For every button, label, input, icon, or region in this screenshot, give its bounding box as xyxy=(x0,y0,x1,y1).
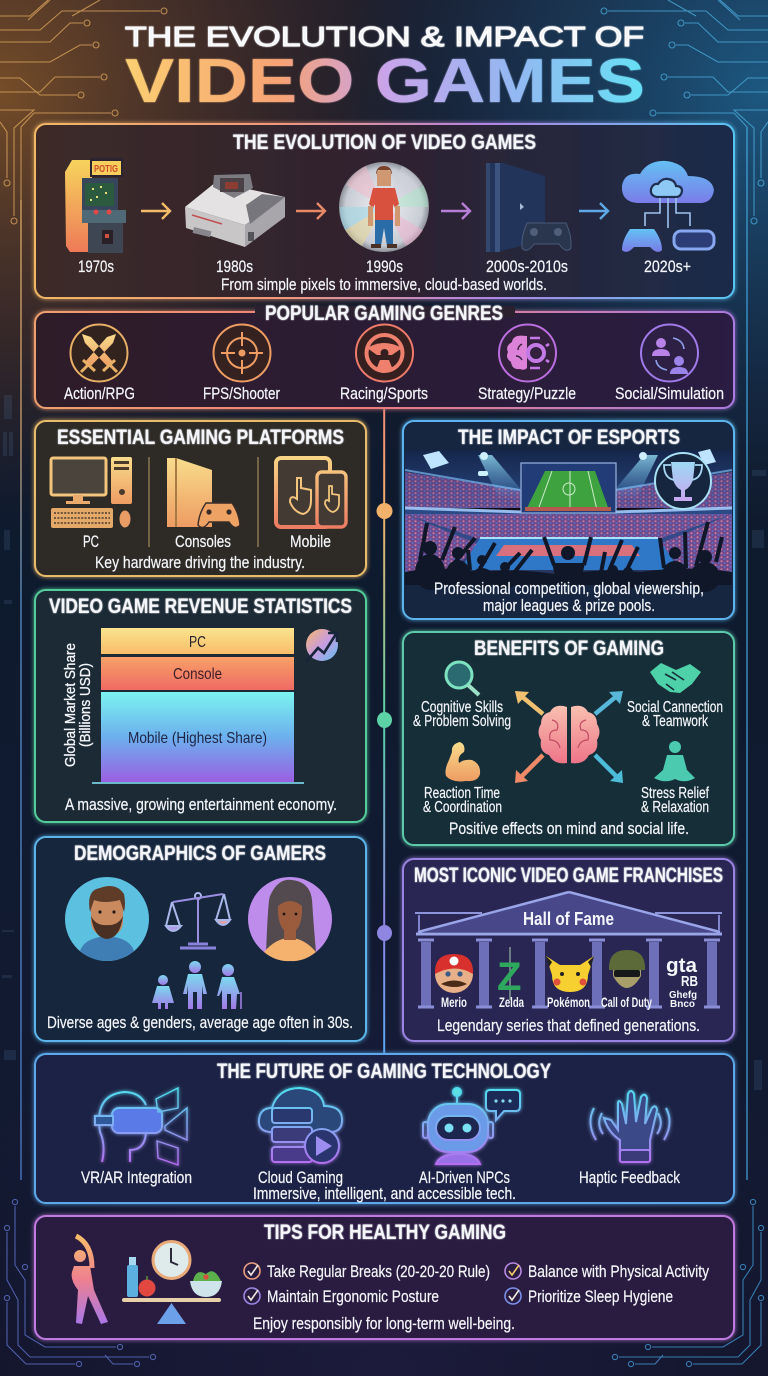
crowd silhouettes xyxy=(405,522,732,592)
speech dots xyxy=(494,1099,512,1103)
icon: stretching figure xyxy=(72,1236,108,1324)
benefit labels: Reaction Time xyxy=(424,785,500,802)
icon: cloud server xyxy=(259,1088,342,1163)
benefit labels: Stress Relief xyxy=(641,785,710,802)
icon: growth arrow xyxy=(306,629,338,662)
benefit labels: & Teamwork xyxy=(642,713,708,730)
stacked bar chart xyxy=(92,628,304,783)
icon: meditation figure xyxy=(654,741,695,781)
labels: Haptic Feedback xyxy=(579,1168,680,1187)
heading: DEMOGRAPHICS OF GAMERS xyxy=(74,842,326,865)
franchise labels: Pokémon xyxy=(547,995,590,1010)
arrows xyxy=(520,695,618,778)
icon: plumber xyxy=(435,954,473,993)
icon: soldier xyxy=(609,950,645,988)
caption: Legendary series that defined generations. xyxy=(437,1016,700,1035)
y axis label xyxy=(62,643,94,767)
heading: ESSENTIAL GAMING PLATFORMS xyxy=(57,426,344,449)
panel frame xyxy=(35,837,366,1041)
heading: POPULAR GAMING GENRES xyxy=(265,302,503,325)
decade labels: 2000s-2010s xyxy=(486,257,568,276)
arrow xyxy=(296,203,325,219)
heading: THE EVOLUTION OF VIDEO GAMES xyxy=(233,131,536,154)
icon: muscle arm xyxy=(445,742,480,781)
panel frame xyxy=(35,1054,734,1203)
labels: VR/AR Integration xyxy=(81,1168,192,1187)
panel: tips xyxy=(35,1216,734,1339)
benefit labels: & Problem Solving xyxy=(413,713,511,730)
labels: AI-Driven NPCs xyxy=(419,1168,510,1187)
stadium illustration xyxy=(405,449,732,592)
icon: yellow mouse xyxy=(546,956,594,992)
label: Strategy/Puzzle xyxy=(478,384,576,403)
decade labels xyxy=(78,257,691,276)
heading: THE FUTURE OF GAMING TECHNOLOGY xyxy=(217,1060,551,1083)
big screen xyxy=(521,463,616,513)
benefit labels: Social Cannection xyxy=(627,699,723,716)
benefit labels: & Coordination xyxy=(423,799,502,816)
icon: handshake xyxy=(650,663,701,693)
panel: revenue xyxy=(35,590,366,822)
game logo text: gta xyxy=(666,955,698,977)
icon: haptic glove xyxy=(590,1091,670,1162)
heading gap xyxy=(255,306,515,318)
caption: major leagues & prize pools. xyxy=(483,596,655,615)
icon: woman avatar xyxy=(248,877,332,961)
labels xyxy=(83,532,331,551)
labels: PC xyxy=(83,532,99,551)
icon: crosshair xyxy=(214,324,270,382)
panel: genres xyxy=(35,302,734,408)
arrow xyxy=(441,203,470,219)
heading: THE IMPACT OF ESPORTS xyxy=(458,426,680,449)
tip checkmarks xyxy=(244,1263,521,1304)
caption: Enjoy responsibly for long-term well-being. xyxy=(253,1314,515,1333)
benefit labels: & Relaxation xyxy=(641,799,709,816)
heading: BENEFITS OF GAMING xyxy=(474,637,664,660)
circuit traces: bottom left xyxy=(4,1199,156,1367)
decade labels: 1980s xyxy=(216,257,253,276)
tips list xyxy=(267,1262,709,1306)
decade labels: 2020s+ xyxy=(644,257,691,276)
icon: modern console xyxy=(486,163,571,252)
stacked bar chart: Console xyxy=(173,666,222,683)
panel frame xyxy=(35,124,734,298)
caption: Immersive, intelligent, and accessible tech. xyxy=(253,1184,516,1203)
game logo text: Bnco xyxy=(670,999,695,1010)
icon: cloud network xyxy=(622,161,714,252)
side tech marks xyxy=(2,395,766,1090)
heading: VIDEO GAME REVENUE STATISTICS xyxy=(49,595,352,618)
icon: arcade cabinet xyxy=(65,158,126,253)
caption: Professional competition, global viewership, xyxy=(434,579,704,598)
panel frame xyxy=(35,312,734,408)
icon: robot xyxy=(423,1088,520,1164)
panel: benefits xyxy=(403,632,734,845)
benefit labels xyxy=(413,699,723,816)
icon: arcade cabinet: POTIG xyxy=(94,164,118,175)
icon: man avatar xyxy=(65,877,149,961)
game logo text: RB xyxy=(681,973,698,990)
icon: disc with character xyxy=(339,162,429,252)
arrowheads xyxy=(515,691,623,783)
divider xyxy=(149,457,258,547)
label: Social/Simulation xyxy=(615,384,724,403)
icon: magnifier xyxy=(446,662,479,695)
icon: age group figures xyxy=(152,961,241,1009)
title line 1: THE EVOLUTION & IMPACT OF xyxy=(125,21,644,52)
icon: VR headset xyxy=(95,1088,187,1165)
caption xyxy=(434,579,704,615)
game logo text xyxy=(666,955,698,1010)
caption: Positive effects on mind and social life. xyxy=(449,819,689,838)
circuit traces: top left xyxy=(0,0,167,224)
panel: demographics xyxy=(35,837,366,1041)
panel: evolution xyxy=(35,124,734,298)
icon: social swap xyxy=(641,324,698,382)
panel: future xyxy=(35,1054,734,1203)
panel frame xyxy=(403,859,734,1041)
tips list: Prioritize Sleep Hygiene xyxy=(528,1287,673,1306)
icon: brain with gear xyxy=(499,324,556,382)
franchise labels: Merio xyxy=(441,995,467,1010)
stacked bar chart: PC xyxy=(189,634,206,651)
trophy badge xyxy=(655,453,711,509)
labels xyxy=(81,1168,680,1187)
franchise labels: Call of Duty xyxy=(601,995,652,1010)
arrow xyxy=(141,203,170,219)
icon: balance scales xyxy=(166,893,230,948)
franchise labels xyxy=(441,995,652,1010)
panel frame xyxy=(403,421,734,619)
franchise labels: Zelda xyxy=(499,995,524,1010)
caption: Key hardware driving the industry. xyxy=(95,553,305,572)
labels: Mobile xyxy=(290,532,331,551)
center connector line xyxy=(376,408,392,1054)
heading: TIPS FOR HEALTHY GAMING xyxy=(264,1221,506,1244)
labels: Consoles xyxy=(175,532,231,551)
icon: tablet and phone xyxy=(276,458,346,527)
caption: A massive, growing entertainment economy. xyxy=(65,795,337,814)
panel frame xyxy=(403,632,734,845)
title xyxy=(125,21,645,116)
labels: Cloud Gaming xyxy=(258,1168,343,1187)
y axis label: Global Market Share xyxy=(62,643,79,767)
decade labels: 1970s xyxy=(78,257,114,276)
panel frame xyxy=(35,1216,734,1339)
benefit labels: Cognitive Skills xyxy=(421,699,503,716)
panel: platforms xyxy=(35,421,366,576)
panel: franchises xyxy=(403,859,734,1041)
icon: desktop pc xyxy=(51,457,132,528)
icon: green Z: Z xyxy=(497,955,521,999)
y axis label: (Billions USD) xyxy=(77,663,94,747)
arrow xyxy=(579,203,608,219)
temple: Hall of Fame xyxy=(523,909,614,929)
icon: brain xyxy=(538,706,600,763)
panel frame xyxy=(35,421,366,576)
icon: console and controller xyxy=(167,458,240,527)
caption: Diverse ages & genders, average age often in 30s. xyxy=(47,1013,353,1032)
circuit traces: bottom right xyxy=(612,1199,764,1367)
outer rails xyxy=(21,127,747,1180)
icon: steering wheel xyxy=(356,324,413,382)
icon: balance with items xyxy=(122,1242,222,1324)
icon: retro console xyxy=(185,174,285,247)
label: Racing/Sports xyxy=(340,384,428,403)
panel: esports xyxy=(403,421,734,619)
circuit traces: top right xyxy=(601,0,768,224)
temple xyxy=(415,892,722,1008)
icon: crossed swords xyxy=(70,324,128,382)
label: FPS/Shooter xyxy=(203,384,280,403)
tips list: Maintain Ergonomic Posture xyxy=(267,1287,439,1306)
title line 2: VIDEO GAMES xyxy=(125,47,645,116)
game logo text: Ghefg xyxy=(669,990,697,1001)
tips list: Take Regular Breaks (20-20-20 Rule) xyxy=(267,1262,490,1281)
tips list: Balance with Physical Activity xyxy=(528,1262,709,1281)
caption: From simple pixels to immersive, cloud-based worlds. xyxy=(221,275,547,294)
stacked bar chart: Mobile (Highest Share) xyxy=(128,730,267,747)
panel frame xyxy=(35,590,366,822)
decade labels: 1990s xyxy=(366,257,403,276)
label: Action/RPG xyxy=(64,384,135,403)
